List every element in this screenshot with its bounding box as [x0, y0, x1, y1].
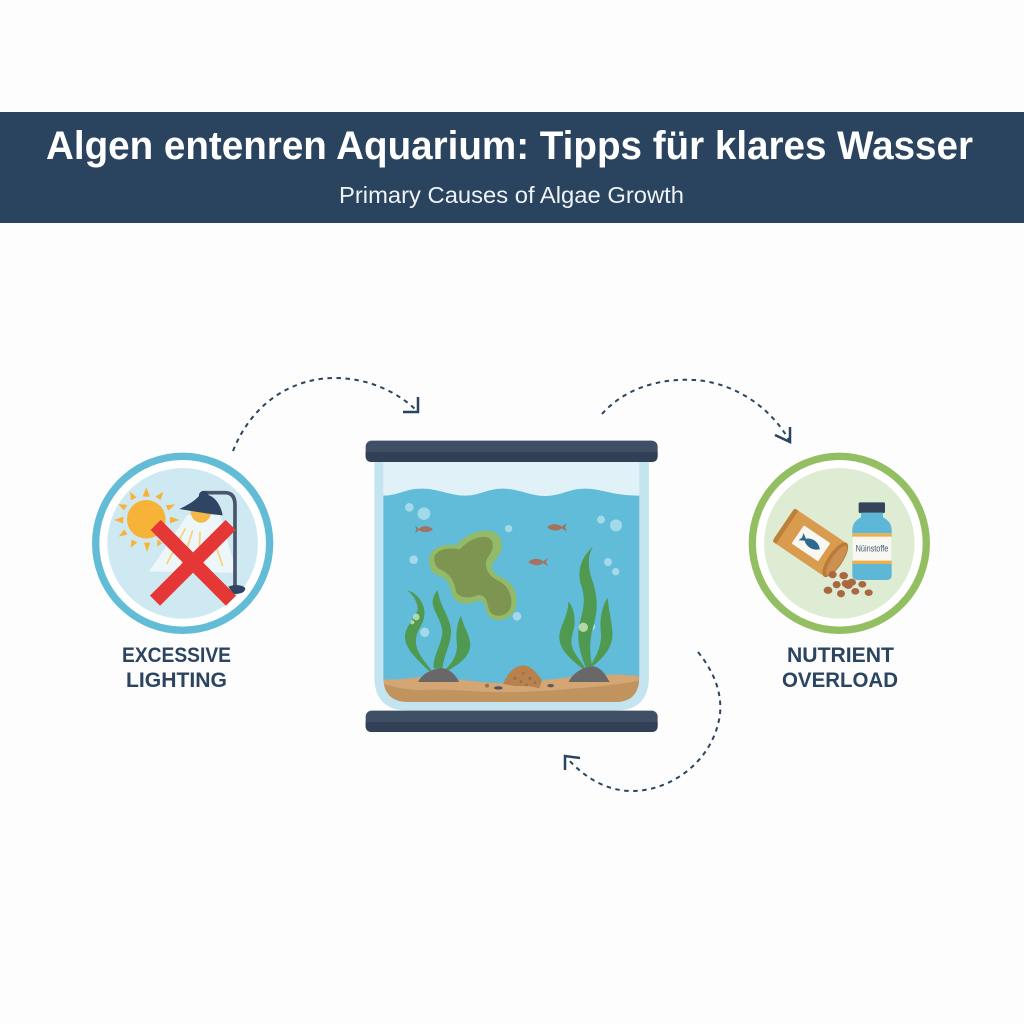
- label: nutrient overload: [782, 644, 898, 692]
- aquarium: [366, 441, 658, 732]
- icon: red cross: [155, 525, 231, 601]
- food pile: [485, 665, 554, 690]
- panel: excessive lighting: [96, 456, 270, 692]
- food can: [772, 508, 853, 581]
- header band: [0, 112, 1024, 223]
- plants right: [559, 547, 612, 669]
- bottom rim: [366, 711, 658, 732]
- top rim: [366, 441, 658, 462]
- arrow: return loop: [565, 652, 720, 791]
- fish on can label: [799, 533, 822, 553]
- bottle: [852, 502, 892, 580]
- label: excessive lighting: [122, 644, 231, 692]
- label: excessive lighting: EXCESSIVE: [122, 644, 231, 667]
- icon: food and fertilizer: [752, 456, 926, 630]
- sand: [383, 675, 639, 703]
- fish: [415, 523, 567, 566]
- pellets: [824, 571, 873, 597]
- arrow: aquarium to nutrient: [602, 380, 790, 442]
- title: Algen entenren Aquarium: Tipps für klares Wasser: [46, 124, 973, 168]
- algae patch: [429, 530, 517, 620]
- icon: sun: [114, 487, 179, 552]
- light cone: [149, 515, 237, 573]
- bottle: Nüinstoffe: [856, 543, 888, 553]
- panel: nutrient overload: [752, 456, 926, 692]
- plants left: [405, 590, 470, 671]
- label: nutrient overload: NUTRIENT: [787, 644, 894, 667]
- plant highlights: [410, 614, 588, 632]
- water: [383, 489, 639, 702]
- glass tank: [374, 460, 649, 711]
- rocks: [418, 666, 610, 682]
- bubbles: [405, 503, 622, 637]
- label: nutrient overload: OVERLOAD: [782, 669, 898, 692]
- label: excessive lighting: LIGHTING: [126, 669, 227, 692]
- arrow: lighting to aquarium: [233, 378, 418, 451]
- icon: lighting crossed out: [96, 456, 270, 630]
- icon: lamp: [179, 491, 245, 594]
- subtitle: Primary Causes of Algae Growth: [339, 182, 684, 208]
